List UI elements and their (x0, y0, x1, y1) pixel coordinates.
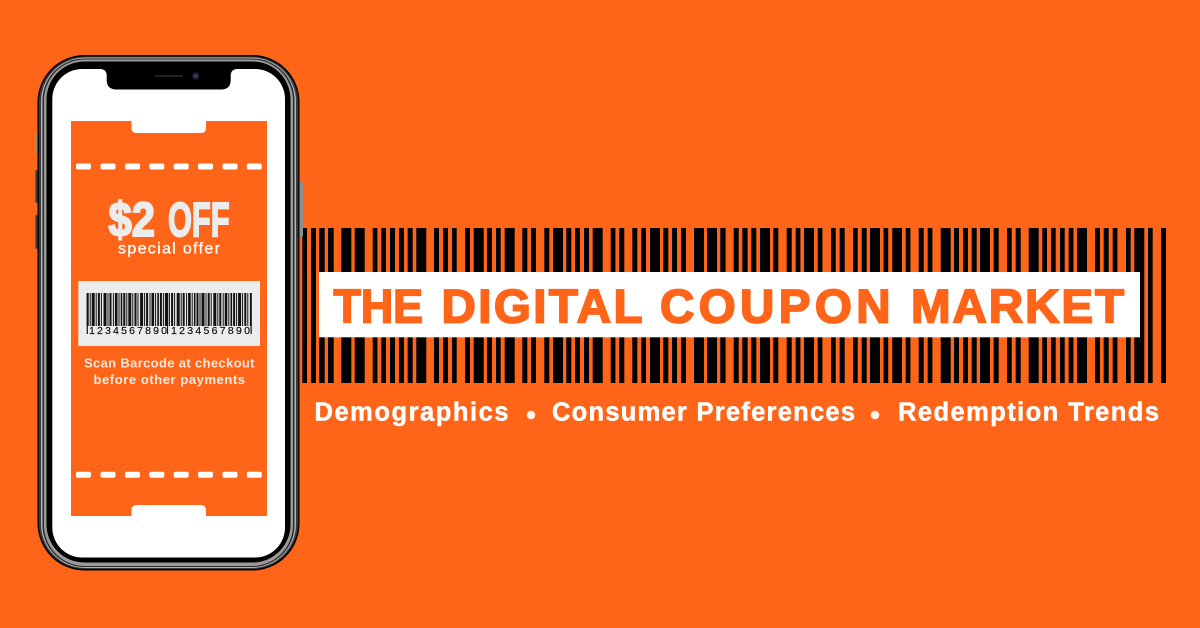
title: MARKET (911, 280, 1124, 334)
subtitle topics: Consumer Preferences (552, 399, 855, 427)
subtitle topics (314, 399, 1159, 427)
title (334, 280, 1124, 334)
subtitle topics: Redemption Trends (898, 399, 1159, 427)
top perforation (76, 164, 262, 170)
small barcode panel: 1234567890 (171, 325, 250, 337)
discount headline: OFF (168, 194, 230, 247)
title panel (319, 272, 1140, 337)
smartphone (35, 55, 303, 570)
bottom perforation (76, 472, 262, 478)
phone frame (38, 55, 300, 570)
large barcode banner (302, 228, 1166, 383)
coupon (71, 121, 267, 516)
small barcode panel (78, 281, 260, 346)
small barcode panel: 1234567890 (89, 325, 167, 337)
subtitle topics: Demographics (314, 399, 508, 427)
discount headline: $2 (108, 194, 155, 247)
screen (52, 69, 285, 558)
title: DIGITAL (442, 280, 642, 334)
special offer label: special offer (118, 240, 221, 258)
notch (100, 66, 238, 90)
discount headline (108, 194, 230, 247)
redemption instructions (84, 356, 255, 387)
title: COUPON (660, 280, 890, 334)
coupon body (71, 121, 267, 516)
redemption instructions: before other payments (94, 372, 245, 387)
side buttons (35, 134, 303, 249)
title: THE (334, 280, 423, 334)
redemption instructions: Scan Barcode at checkout (84, 356, 255, 371)
